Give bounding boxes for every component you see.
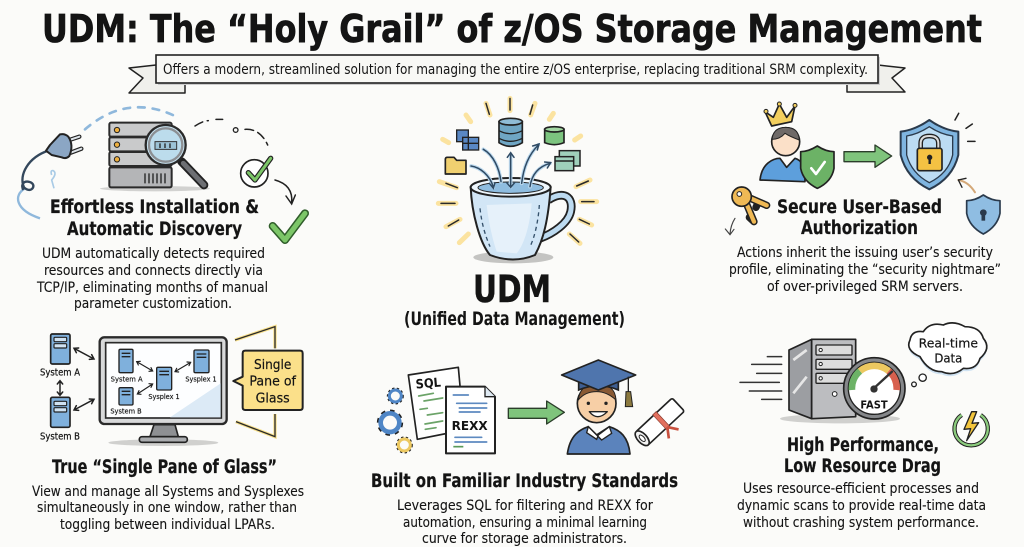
heading: effortless installation: Effortless Installation & [50, 197, 259, 218]
arrows into cup [471, 144, 551, 188]
heading: effortless installation [50, 197, 259, 240]
heading: secure authorization [777, 197, 942, 239]
banner [129, 55, 905, 93]
icon: user, shields, lock and keys [725, 102, 1000, 235]
panel: secure authorization [725, 102, 1001, 295]
callout: real-time data: Real-time [919, 336, 978, 350]
callout: real-time data: Data [934, 352, 962, 366]
icon: power bolt [954, 412, 988, 445]
callout: real-time data [909, 323, 987, 376]
callout: single pane of glass: Single [254, 358, 291, 373]
heading: high performance: High Performance, [787, 435, 939, 456]
heading: secure authorization: Authorization [801, 218, 918, 239]
icon: monitor with systems and callout: System A [40, 367, 81, 378]
panel: effortless installation [18, 107, 305, 312]
panel: single pane of glass [32, 327, 304, 533]
callout: single pane of glass: Pane of [249, 375, 296, 390]
subheading: unified data management: (Unified Data Management) [404, 308, 625, 330]
callout: single pane of glass [233, 351, 303, 410]
banner: Offers a modern, streamlined solution for managing the entire z/OS enterprise, replacing traditional SRM complexity. [163, 62, 868, 78]
text block: familiar standards: Leverages SQL for filtering and REXX for [397, 498, 653, 514]
text block: secure authorization [729, 245, 1001, 295]
panel: familiar standards [371, 360, 691, 547]
heading: UDM: UDM [473, 268, 551, 311]
text block: familiar standards [397, 498, 653, 547]
text block: single pane of glass: toggling between individual LPARs. [60, 517, 275, 533]
icon: coffee cup with data objects [438, 98, 597, 263]
icon: server, gauge, cloud and bolt [740, 323, 988, 445]
icon: monitor with systems and callout: System B [40, 431, 80, 442]
icon: gauge: FAST [860, 398, 888, 411]
text block: single pane of glass: simultaneously in one window, rather than [37, 500, 297, 516]
heading: effortless installation: Automatic Discovery [67, 219, 242, 240]
heading: single pane of glass: True “Single Pane of Glass” [52, 457, 277, 478]
text block: familiar standards: curve for storage administrators. [422, 531, 627, 547]
icon: blue blocks [457, 130, 479, 150]
icon: keys [732, 187, 767, 222]
callout: single pane of glass: Glass [256, 391, 290, 406]
text block: secure authorization: of over-privileged SRM servers. [767, 279, 963, 295]
icon: SQL and REXX documents, arrow, graduate: REXX [452, 418, 488, 433]
text block: high performance: without crashing system performance. [743, 515, 979, 531]
icon: monitor with systems and callout: Sysplex 1 [185, 374, 217, 383]
panel: UDM centre [404, 98, 625, 330]
icon: gauge [844, 358, 905, 419]
text block: high performance: Uses resource-efficient processes and [743, 481, 979, 497]
text block: effortless installation [36, 246, 268, 312]
text block: effortless installation: parameter customization. [74, 296, 232, 312]
icon: monitor with systems and callout: Sysplex 1 [148, 392, 180, 401]
text block: secure authorization: Actions inherit the issuing user’s security [737, 245, 993, 261]
text block: single pane of glass: View and manage all Systems and Sysplexes [32, 484, 304, 500]
icon: monitor with systems and callout [40, 327, 303, 446]
text block: effortless installation: TCP/IP, eliminating months of manual [36, 280, 268, 296]
icon: diploma [632, 397, 691, 455]
icon: SQL and REXX documents, arrow, graduate: SQL [415, 375, 441, 392]
icon: folder [445, 157, 466, 174]
text block: effortless installation: UDM automatically detects required [42, 246, 265, 262]
icon: gears [379, 388, 412, 453]
panel: high performance [737, 323, 988, 531]
icon: graduate [562, 360, 636, 454]
icon: database [499, 118, 522, 146]
icon: plug, server and magnifier with checks [18, 107, 305, 240]
text block: single pane of glass [32, 484, 304, 533]
text block: high performance: dynamic scans to provide real-time data [737, 498, 986, 514]
text block: effortless installation: resources and connects directly via [44, 263, 263, 279]
heading: secure authorization: Secure User-Based [777, 197, 942, 218]
icon: SQL and REXX documents, arrow, graduate [379, 360, 691, 455]
icon: windows [555, 151, 580, 171]
text block: high performance [737, 481, 986, 531]
icon: monitor with systems and callout: System A [111, 374, 143, 383]
heading: high performance [784, 435, 941, 477]
text block: familiar standards: automation, ensuring a minimal learning [403, 515, 647, 531]
icon: green cylinder [545, 127, 564, 145]
icon: monitor with systems and callout: System B [110, 407, 142, 416]
heading: high performance: Low Resource Drag [784, 456, 941, 477]
heading: familiar standards: Built on Familiar Industry Standards [371, 471, 678, 492]
